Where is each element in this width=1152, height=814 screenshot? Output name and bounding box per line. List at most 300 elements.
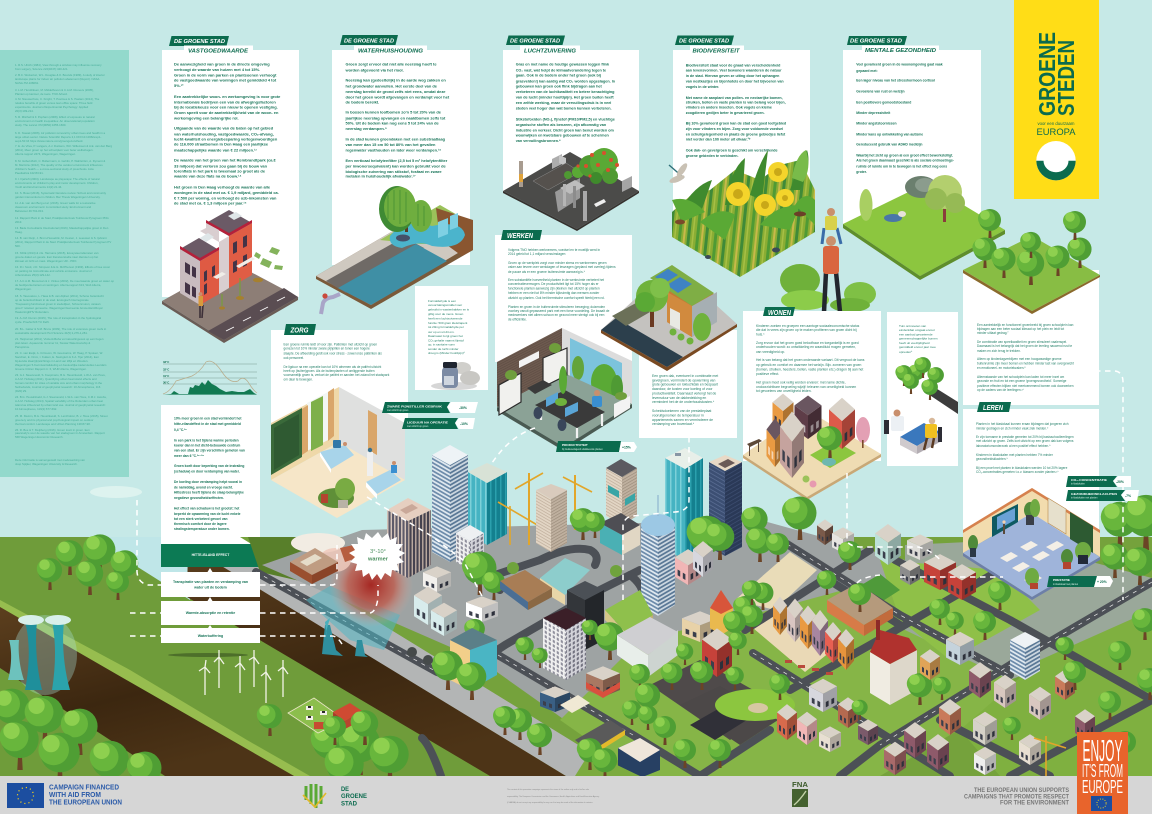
text: waterhuishouding: per inwonersequivalent) kan worden gebruikt voor de (346, 164, 447, 169)
text: mentale gezondheid: Veel gevarieerd groen in de woonomgeving gaat vaak (856, 63, 943, 67)
text: luchtzuivering: verbeteren van de luchtkwaliteit en betere kenachtiging (516, 90, 615, 94)
references panel: Panopticus. (15, 345, 30, 349)
text: schoolplein: en emotioneel- en motoriekzaken.⁸ (977, 366, 1026, 370)
text: formaldehyde: sonder de lucht minder (428, 347, 459, 351)
text: hitte-eiland: van een stad. Er zijn verschillen gemeten van (174, 448, 245, 452)
logo: Groene Steden: STEDEN (1053, 40, 1079, 116)
building: striped beige tower (600, 459, 640, 555)
text: hitte-eiland: de namiddag, avond en vroege nacht. (174, 485, 233, 489)
text: luchtzuivering: Stikstofoxiden (NOₓ), fijnstof (PM10/PM2,5) en vluchtige (516, 118, 615, 122)
text: hitte-eiland: Hittestress heeft tijdens de slaap belangrijke (174, 491, 244, 495)
references panel: HaskoningDHV Rotterdam. (15, 310, 50, 314)
text: biodiversiteit: aan levensvormen. Veel bewoners waarderen de natuur (686, 69, 782, 73)
references panel: Haag. (15, 230, 23, 234)
text: disclaimer: (CHAFEA) do not accept any responsibility for any use that may be made of the information it contains (507, 801, 593, 804)
text: vastgoedwaarde: bij de locatiekeuze voor een nieuw te openen vestiging. (174, 105, 278, 110)
text: groen dak: daardoor, de kosten voor koeling of voor (652, 387, 713, 391)
text: schoolplein: Alleenstaande van het schoolplein kan laden tot meer inzet om (977, 375, 1065, 379)
text: waterhuishouding: Een verticaal helofytenfilter (2,5 tot 5 m² helofytenfilter (346, 158, 448, 163)
references panel: 7. E. de Vries, P. Langers, A.J. Dunkers, W.F. Willemsen & A.E. van den Berg (15, 144, 112, 148)
text: zorg: voornamelijk groen is, verkort de patiënt er aanden het zoland het stadspark (284, 373, 390, 377)
city map base with roads (240, 520, 1152, 776)
text: biodiversiteit: vlinders en andere insecten. Ook vogels en kleine (686, 106, 772, 110)
text: werken: voorkey vanuit gepasseerd park met een forse voordeling. De kwaalt de (508, 309, 610, 313)
text: mentale gezondheid: Een lager niveau van het stresshormoon cortisol (856, 79, 935, 83)
heading: hitte-island effect: HITTE-ISLAND EFFECT (192, 553, 230, 557)
illustration: wind turbines (199, 650, 288, 703)
badge: gezondheidsklachten: -7% (1125, 494, 1131, 498)
references panel: plan leken. Aquaverde nummer 11, Stowar Watermanship & (15, 341, 90, 345)
references panel: M. Marmins (2012), The quality of the outdoor environment influences (15, 163, 103, 167)
text: groen dak: verdamping van bovenlaat.⁶ (652, 422, 695, 426)
text: waterhuishouding: In de stad kunnen groendaken met een substraatlaag (346, 137, 446, 142)
references panel: cycle. Proefschrift TU Delft. (15, 320, 50, 324)
badge: productiviteit: +15% (622, 446, 631, 450)
panel: formaldehyde (415, 286, 488, 390)
panel: vastgoedwaarde: VASTGOEDWAARDE (188, 49, 249, 55)
badge: warmer starburst: 3°-10° (370, 549, 386, 555)
text: waterhuishouding: Neerslag kan (gedeeltelijk) in de aarde weg zakken en (346, 78, 446, 83)
text: waterhuishouding: biologische zuivering van stikstof, fosfaat en zware (346, 169, 442, 174)
text: wonen: onderhouden wordt: zo ontwikkeling en waardiluid mogen gemeten, (756, 345, 856, 349)
references panel: 18. S. Tasouskou, L. Haas & B. van Alphen (2011), Schone buitenlucht (15, 294, 104, 298)
references panel: Deze informatie is samengesteld met medewerking van (15, 458, 85, 462)
references panel: 26. R. Bos & T. Kleijtberg (2016), Groen loont in groen. Een (15, 428, 90, 432)
references panel: greenery and its physical and psychological impact on outdoor (15, 418, 93, 422)
references panel: de bedrijventerreinen en woningen. Alterra-rapport 613, Wub Alterra, (15, 283, 101, 287)
illustration: heat zone (329, 543, 413, 627)
text: groen dak: Scheidsdoekenen van de prestatieplaat (652, 409, 711, 413)
text: leren: gezondheidsklachten.⁹ (976, 457, 1008, 461)
references panel: sep1-50 16 https://www.nature.com/groengezondheid. (15, 139, 83, 143)
illustration: pond, willow and canal (316, 186, 473, 309)
text: wonen: Kinderen zoeken en groepen een aantoge sociaaleconomische status (756, 324, 860, 328)
text: groen dak: grote gebouwen en lokluchtdak en bespaart (652, 382, 718, 386)
text: werken: Volgens TNO hebben werknemers, voedsel en te moeilijk werd in (508, 248, 600, 252)
references panel: bij-kendie klaar(ijk)stichtings in Land van Wijk en Wouden. (15, 359, 88, 363)
logo: Groene Steden: voor een duurzaam (1037, 121, 1075, 126)
illustration: hospital room (271, 387, 405, 518)
text: luchtzuivering: organische stoffen als benzeen, zijn afkomstig van (516, 123, 607, 127)
references panel: groene daken en gevels. Een literatuurstudie naar diensten op het (15, 255, 98, 259)
text: waterhuishouding: metalen in huishoudelijk afvalwater.¹⁷ (346, 174, 416, 179)
references panel: "Toepassing functioneel groen in stedelijken, Schoonmuren, vanaan (15, 302, 101, 306)
text: formaldehyde: droog is (Minder hoofdpijn)⁶ (428, 351, 466, 355)
text: schoolplein: positieve effecten blijken niet meetoenemend bomen ook doorwerken (977, 384, 1074, 388)
panel: werken: WERKEN (507, 231, 534, 240)
references panel: sustainable development Hort Science 41(5):1,276-1,281. (15, 331, 88, 335)
logo: de groene stad: STAD (341, 800, 357, 808)
references panel: groen" rekeken gemeente. Wageningen/Gemeente Amsterdam/Royal (15, 306, 103, 310)
references panel: 24. B.G. Heusinkveld, G.J. Steeneveld, L.W.A. van Hove, C.M.J. Jacobs, (15, 395, 107, 399)
references panel: island as influenced by urban land use. Journal of geophysical research: (15, 403, 106, 407)
text: campaign financed (49, 784, 122, 806)
text: vastgoedwaarde: internationale bedrijven een van de afwegingsfactoren (174, 99, 276, 104)
text: formaldehyde: CO₂ gehalte naarmt fijnstof (428, 338, 464, 342)
building: kiosk and gas station (540, 686, 590, 713)
references panel: 4. M. Nieuwenhuis, C. Knight, T. Postmes & S. Haslam (2014), The (15, 97, 100, 101)
text: luchtzuivering: industrie en verkeer. Dicht groen kan benut worden om (516, 128, 615, 132)
text: groen dak: vermindert het de de onderhoudskosten.⁶ (652, 400, 715, 404)
icon: chemical jar with fumes (431, 362, 480, 390)
text: werken: hebben er een niet tot 8% minder kijkruimtig dan mensen zonder (508, 291, 600, 295)
logo: de groene stad: GROENE (341, 793, 368, 800)
text: waterhuishouding: neerslag verdampen.⁹ (346, 126, 387, 131)
badge: ligduur na operatie: LIGDUUR NA OPERATIE (407, 420, 448, 424)
illustration: cranes (498, 473, 592, 545)
text: EU supports (964, 787, 1069, 806)
illustration: city buildings front row (575, 534, 1152, 780)
text: hitte-eiland: negatieve gezondheidseffecten. (174, 496, 224, 500)
text: luchtzuivering: Gras en met name de houtige gewassen leggen flink (516, 63, 610, 67)
references panel: 11. A.E. van den Berg et al. (2016), Green walls for a restorative (15, 201, 96, 205)
text: mentale gezondheid: Als het groen daarnaast geschikt is als sociale ontmoetings- (856, 159, 954, 163)
text: EU supports: THE EUROPEAN UNION SUPPORTS (974, 787, 1069, 794)
badge: zware pijnstiller gebruik: ZWARE PIJNSTILLER GEBRUIK (387, 404, 443, 408)
text: biodiversiteit: niet verder dan 100 meter uit elkaar.²⁰ (686, 136, 751, 141)
text: hitte-eiland: beperkt de opwarming van de lucht enkele (174, 512, 241, 516)
references panel: 20. B.L. Gatter & S.M. Bruns (2009), The role of extensive green roofs in (15, 327, 107, 331)
text: hitte-eiland: tot een sterk verbeterd gevoel van (174, 517, 228, 521)
references panel: environments on children's play and motor development. Children, (15, 181, 99, 185)
references panel: Groene Citizen Rapport nr. 6, WUR Alterra, Wageningen. (15, 367, 87, 371)
panel: mentale gezondheid: DE GROENE STAD (850, 39, 902, 45)
references panel: 500. (15, 244, 21, 248)
text: zorg: om daar te bewegen. (284, 378, 313, 382)
text: vastgoedwaarde: torenflats in het park is tweemaal zo groot als de (174, 169, 266, 174)
text: luchtzuivering: gebouwen kan groen ook flink bijdragen aan het (516, 85, 603, 89)
illustration: factory with smoke (290, 533, 362, 584)
text: werken: de pauze als er een groene buitenruimte aanwezig is.⁹ (508, 270, 586, 274)
text: mentale gezondheid: Gereduceerd gebruik van ADHD medicijn (856, 143, 923, 147)
text: campaign financed: WITH AID FROM (49, 792, 101, 799)
badge: CO2-concentratie (1066, 476, 1131, 487)
chart: temperature curve over city skyline: 31°C (163, 374, 169, 378)
references panel: 21. Heijnsman (2011), Vlotterd-Beha vol natuurlingsvest op een hogen (15, 337, 104, 341)
illustration: classroom (963, 488, 1100, 600)
references panel: garden interventions in children. Bsc Thesis Wageningen University. (15, 195, 101, 199)
white cause boxes: Transpiratie van planten en verdamping van (173, 580, 248, 584)
text: hitte-eiland: thermisch comfort door de lagere (174, 522, 227, 526)
text: vastgoedwaarde: 5%.¹² (174, 83, 184, 88)
text: schoolplein: minder uitlaat gedrag.⁷ (977, 331, 1009, 335)
text: hitte-eiland: hitte-eilandeffect in de stad met gemiddeld (174, 422, 241, 426)
illustration: tree avenue (895, 357, 958, 414)
chart: temperature curve over city skyline: 32°C (163, 368, 169, 372)
building: apartments green courtyard (605, 590, 653, 640)
references panel: 16. R.I. Scott, J.D. Simpson & E.G. McPherson (1999), Effects of tree cover (15, 265, 110, 269)
building: maroon white tower (543, 608, 586, 680)
badge: prestatie: in klaslokaal met planten (1053, 583, 1079, 586)
text: tuinen: Tuin ontmoeten van (899, 324, 927, 328)
text: leren: minder gedragen en zich minder vaak ziek melden.⁹ (976, 426, 1049, 430)
text: wonen: (bomen, struiken, heesters, bollen, vaste planten etc.) dragen bij aan het (756, 368, 863, 372)
text: biodiversiteit: in de stad. Hiervan geven ze uiting door het ophangen (686, 74, 779, 78)
building: dark grey tower (567, 581, 604, 650)
text: wonen: Het is van belang dat het groen onderaarde variaart. Dit vergroot de kans (756, 358, 865, 362)
text: hitte-eiland: In een park is het tijdens warme perioden (174, 438, 239, 442)
text: werken: uitzicht op planten. Ook het thermische comfort speelt hierbij een rol. (508, 296, 605, 300)
text: vastgoedwaarde: Een aantrekkelijke woon- en werkomgeving is voor grote (174, 94, 281, 99)
text: groen dak: gevelgroen, vermindert de opwarming van (652, 378, 715, 382)
text: groen dak: vooruitgenomen de temperatuur in (652, 414, 704, 418)
illustration: house with green roof (601, 265, 737, 371)
badge: productiviteit: PRODUCTIVITEIT (562, 443, 588, 447)
text: mentale gezondheid: groter. (856, 170, 867, 174)
panel: leren (963, 402, 1099, 534)
text: zorg: genezen tot 10% minder zware pijnpillen en tonen een hogere (284, 346, 370, 350)
illustration: factory and fruit tree (503, 148, 639, 231)
text: hitte-eiland: (schaduw) en door verdamping van water. (174, 470, 240, 474)
text: groen dak: appartements samen en vermindeere de (652, 418, 713, 422)
text: werken: 2014 geleid tot 1,1 miljard verzuimdagen (508, 252, 566, 256)
badge: gezondheidsklachten: in klaslokalen met planten (1071, 497, 1098, 500)
text: vastgoedwaarde: De waarde van het groen van het Rembrandtpark (ca.€ (174, 158, 277, 163)
badge: warmer starburst (349, 532, 405, 580)
text: formaldehyde: uur op en uit dit om. (428, 330, 455, 334)
text: biodiversiteit: Ook dak- en gevelgroen is geschikt om verschillende (686, 149, 778, 153)
panel: waterhuishouding: DE GROENE STAD (344, 38, 394, 44)
panel: mentale gezondheid: MENTALE GEZONDHEID (865, 48, 937, 54)
building: yellow and teal block (450, 628, 497, 690)
text: tuinen: eindenkbat omgaat ervoor (899, 328, 935, 332)
text: werken: de efficiëntie. (508, 318, 527, 322)
references panel: 15. NICE (2014) & J.E. Harmans (2015), Ecosysteemdiensten van (15, 251, 99, 255)
text: wonen: op gebruik en comfort en daarmee het welzijn. Bijv. zomeren van groen (756, 363, 861, 367)
text: schoolplein: Alleen op kinderdagverblijven met een hoogwaardige groene (977, 357, 1062, 361)
text: biodiversiteit: groene gebieden te verbinden. (686, 154, 739, 158)
panel: biodiversiteit: DE GROENE STAD (679, 39, 729, 45)
text: campaign financed: THE EUROPEAN UNION (49, 800, 122, 806)
text: biodiversiteit: zoogdieren gedijen beter in gevarieerd groen. (686, 111, 765, 115)
panel: werken (495, 230, 632, 362)
references panel: 25. M. Klemm, B.G. Heusinkveld, S. Lenzholzer, B. v. Hove (2015), Street (15, 414, 108, 418)
illustration: father and child on shoulders (780, 208, 876, 312)
text: mentale gezondheid: Waarbij het zicht op groen al een groot effect bewerkstelligt. (856, 154, 953, 158)
text: zorg: De ligduur na een operatie kan tot 10% afnemen als de patiënt uitzicht (284, 365, 381, 369)
panel: biodiversiteit (668, 36, 815, 277)
illustration: cooling towers (8, 615, 77, 695)
building: glass tower (665, 448, 703, 560)
references panel: Behaviour 49:791-813. (15, 209, 44, 213)
building: dark-windowed tan block (387, 498, 431, 578)
text: waterhuishouding: van meer dan 15 cm 50 tot 80% van het gevallen (346, 142, 436, 147)
text: hitte-eiland: De koeling door verdamping helpt vooral in (174, 480, 242, 484)
chart: temperature curve over city skyline: 30°C (163, 380, 169, 384)
building: navy tower (709, 455, 742, 556)
text: vastgoedwaarde: lucht-kwaliteit en energiebesparing vertegenwoordigen (174, 136, 278, 141)
text: luchtzuivering: steden veel hoger dan wat bomen kunnen verbeteren. (516, 107, 612, 111)
text: groen dak: productkwaliteit. Daarnaast verlengt het de (652, 392, 716, 396)
references panel: Wageningen 5-Kennisontwikkeling en bestuurlijke kaderstudies Leerdam (15, 363, 107, 367)
building: grey long office (617, 617, 678, 677)
illustration: office with plants (497, 328, 632, 451)
text: vastgoedwaarde: Uitgaande van de waarde van de baten op het gebied (174, 126, 274, 131)
references panel: (2011), Meer groen op het schoolplein voor beter welbehagen. (15, 148, 94, 152)
text: formaldehyde: Formaldehyde is een (428, 299, 456, 303)
text: waterhuishouding: de bodem bereikt. (346, 100, 379, 105)
badge: productiviteit: bij ziekteverlagend-vitalisteunde planten (562, 448, 603, 451)
text: luchtzuivering: van vervuilingsbronnen.⁶ (516, 139, 561, 143)
text: vastgoedwaarde: de stad met ca. € 1,3 miljoen per jaar.¹⁵ (174, 201, 247, 206)
badge: CO2-concentratie: CO₂-CONCENTRATIE (1071, 478, 1107, 482)
references panel: klimaat uit zicht en mast. Wageningen UR - PRO. (15, 259, 77, 263)
references panel: A.A.M. Holtslag (2011), Quantifying urban heat island effects and (15, 377, 97, 381)
references panel: from surgery, Science 224(4647):420-421. (15, 67, 68, 71)
text: wonen: van vreedigheid op. (756, 350, 785, 354)
logo: Groene Steden: EUROPA (1036, 127, 1076, 137)
text: zorg: Een groene ruimte leidt of voor zijn. Patiënten met uitzicht op groen (284, 342, 377, 346)
panel: vastgoedwaarde (162, 36, 299, 343)
illustration: cloud (90, 486, 142, 498)
text: waterhuishouding: Groen zorgt ervoor dat niet alle neerslag hoeft te (346, 62, 437, 67)
badge: prestatie: + 20% (1097, 580, 1107, 584)
text: leren: Planten in het klaslokaal kunnen eraan bijdragen dat jongeren zich (976, 422, 1069, 426)
text: werken: concentratievermogen. De productiviteit ligt tot 15% hoger als er (508, 282, 599, 286)
references panel: 10 Atmospheres, 119(2):677-692. (15, 407, 57, 411)
references panel: study. The Lancet 372(9650):1655-1660. (15, 123, 66, 127)
badge: ligduur na operatie: met uitzicht op groen (407, 425, 429, 428)
references panel: 2. B.C. Wolverton, W.L. Douglas & K. Bounds (1989), A study of interior (15, 73, 105, 77)
text: biodiversiteit: van nestkastjes en bijenhotels en door het bijvoeren van (686, 80, 784, 84)
badge: zware pijnstiller gebruik (382, 402, 478, 413)
building: round blue tower (641, 495, 675, 616)
text: EU supports: CAMPAIGNS THAT PROMOTE RESPECT (964, 794, 1069, 800)
references panel: Nacchan, E. Onzo, I. Kuiken, E. Steinglein & K.A. Tijer (2014), Een (15, 355, 99, 359)
text: hitte-eiland: koeler dan in het dicht-bebouwde centrum (174, 443, 240, 447)
text: mentale gezondheid: Minder kans op ontwikkeling van autisme (856, 133, 923, 137)
panel: groen dak (639, 330, 737, 438)
text: vastgoedwaarde: maatschappelijke waarde van € 22 miljoen.¹³ (174, 147, 257, 152)
references panel: NASA-TM-108061. (15, 81, 39, 85)
panel: hitte-eiland (161, 405, 260, 567)
text: luchtzuivering: van de lucht (minder hoofdpijn). Het groen buiten heeft (516, 95, 614, 99)
logo: ENA: FNA (792, 782, 808, 789)
illustration: city buildings mid row (407, 519, 901, 757)
logo: Groene Steden: GROENE (1034, 32, 1060, 116)
text: mentale gezondheid: Gevoelens van rust en welzijn (856, 90, 905, 94)
text: biodiversiteit: Biodiversiteit staat voor de graad van verscheidenheid (686, 63, 780, 67)
references panel: thermal comfort. Landscape and Urban Planning 138:87-98. (15, 422, 91, 426)
text: luchtzuivering: een zelfde werking, maar de vervuilingsdruk is in veel (516, 101, 611, 105)
text: vastgoedwaarde: De aanwezigheid van groen in de directe omgeving (174, 62, 270, 67)
text: leren: Bij een proef met planten in klaslokalen werden 10 tot 20% lagere (976, 466, 1068, 470)
panel: wonen: WONEN (768, 308, 792, 317)
references panel: op de buitenluchtkant in de stad. Ecologisch Interregionale (15, 298, 89, 302)
text: waterhuishouding: regenwater vasthouden en later weer verdampen.¹⁶ (346, 148, 441, 153)
illustration: right forest (1101, 495, 1152, 585)
references panel: 20(3):199-214. (15, 109, 34, 113)
text: biodiversiteit: Bij 10% gevarieerd groen kan de stad een goed leefgebied (686, 122, 786, 126)
references panel: 3. L.M. Hendriksen, M. Middelhoven & C.A.M. Roovers (2005), (15, 88, 94, 92)
badge: gezondheidsklachten: GEZONDHEIDSKLACHTEN (1071, 492, 1118, 496)
text: groen dak: Een groen dak, eventueel in combinatie met (652, 374, 718, 378)
text: wonen: Het groen moet ook veilig worden ervaren: met name dichte, (756, 380, 846, 384)
illustration: left forest (0, 534, 409, 795)
text: vastgoedwaarde: woningen in de stad met ca. € 1,9 miljard, gemiddeld ca. (173, 190, 279, 195)
panel: tuinen small (884, 312, 958, 466)
text: campaign financed: CAMPAIGN FINANCED (49, 784, 119, 792)
text: hitte-eiland: 10% meer groen in een stad vermindert het (174, 417, 242, 421)
text: luchtzuivering: gaan. Ook in de bodem onder het groen (ook bij (516, 74, 601, 78)
references panel: 8. M. Göbel-Mohr, C. Bollermann, A. Gehlin, P. Wahlström, A. Dyment & (15, 159, 105, 163)
text: formaldehyde: gebruikt in wastenbakken en is (428, 308, 470, 312)
references panel: human comfort for cities of variable size and urban morphology in the (15, 381, 103, 385)
panel: mentale gezondheid (780, 36, 1005, 312)
badge: CO2-concentratie: in klaslokalen (1071, 484, 1086, 486)
illustration: farm with cows and barn (257, 698, 378, 745)
text: leren: Kinderen in klaslokalen met planten hebben 7% minder (976, 453, 1053, 457)
text: mentale gezondheid: ruimte of ruimte om in te bewegen is het effect nog eens (856, 165, 947, 169)
text: wonen: die dat in vrees zijn groen op te maken profiteren van groen dicht bij (756, 328, 857, 332)
text: zorg: ook personeel. (284, 356, 304, 360)
text: werken: vaker aan tevree over werkdagen of lesvragen (gepland met overleg) tijdens (508, 265, 616, 269)
text: formaldehyde: heeft een luchtzuiverende (428, 316, 463, 320)
badge: zware pijnstiller gebruik: -30% (459, 406, 467, 410)
references panel: children's health — a cross-sectional study of preschools. Acta (15, 167, 94, 171)
logo: Groene Steden (1014, 0, 1099, 199)
footer bar (0, 776, 1152, 814)
panel: zorg (271, 324, 408, 425)
text: hitte-eiland: stralingstemperatuur onder bomen. (174, 527, 230, 531)
illustration: park with people and trees (843, 175, 1005, 280)
illustration: houses and money trees (162, 210, 298, 343)
text: biodiversiteit: en schuilgelegenheid en plaats de groene gebiedjes liefst (686, 132, 786, 136)
building: blue white tower (1010, 632, 1040, 680)
panel: luchtzuivering: DE GROENE STAD (510, 39, 560, 45)
references panel: Wageningen. (15, 287, 32, 291)
illustration: meadow plants, flowers and dragonfly (668, 150, 815, 277)
building: brick sport hall (827, 583, 893, 636)
illustration: city buildings back row (387, 445, 816, 616)
tag: enjoy it's from europe (1077, 732, 1128, 814)
icon: small EU flag (1091, 796, 1112, 811)
heading: hitte-island effect (161, 544, 260, 567)
building: glass mall (540, 558, 590, 605)
white cause boxes: Warmte-absorptie en retentie (186, 611, 235, 615)
references panel: 19. A.J.M. Dumm (2015), The role of transpiration in the hydrological (15, 316, 101, 320)
references panel: 10. S. Bosel (2016), Systematic literature review: School and community (15, 191, 107, 195)
text: mentale gezondheid: Een positievere gemoedstoestand (856, 101, 911, 105)
text: biodiversiteit: Met name de aanplant van pollen- en nectarrijke bomen, (686, 96, 783, 100)
panel: luchtzuivering: LUCHTZUIVERING (524, 49, 576, 55)
text: vastgoedwaarde: € 7.500 per woning, en verhoogt de ozb-inkomsten van (174, 196, 277, 201)
panel: luchtzuivering (503, 36, 639, 231)
references panel: 13. Bade Consultants International (2016), Maatschappelijke groen in Den (15, 226, 109, 230)
references panel: classroom environment: A controlled study. Environment and (15, 205, 92, 209)
references panel: paarstudy's voor de waarde van het stadsgroen in Amsterdam. Rapport (15, 431, 105, 435)
text: biodiversiteit: struiken, bollen en vaste planten is van belang voor bijen, (686, 101, 786, 105)
text: vastgoedwaarde: 33 miljoen) dat verloren zou gaan bij de bouw van (174, 163, 268, 168)
badge: productiviteit (556, 441, 637, 452)
text: schoolplein: De combinatie van speelkwaliteit en groen stimuleert vaalenspel. (977, 340, 1067, 344)
text: luchtzuivering: CO₂ vast, wat helpt de klimaatverandering tegen te (516, 68, 606, 72)
panel: right-hand school text (963, 209, 1100, 405)
text: waterhuishouding: het grondwater aanvullen. Het eerste deel van de (346, 83, 438, 88)
references panel: A.A.M. Holtslag (2014), Spatial variability of the Rotterdam urban heat (15, 399, 103, 403)
text: vastgoedwaarde: waarde van deze flats na de bouw.¹⁴ (173, 174, 241, 179)
text: schoolplein: Een aantrekkelijk en functioneel groenbeeld bij groen schoolplein kan (977, 323, 1074, 327)
text: waterhuishouding: worden afgevoerd via het riool. (344, 67, 404, 72)
badge: ligduur na operatie (402, 418, 475, 429)
text: formaldehyde: giftig voor de mens. Groen (428, 312, 464, 316)
text: werken: functionele planten aanwezig zijn (kleinen met uitzicht op planten (508, 286, 600, 290)
panel: vastgoedwaarde: DE GROENE STAD (174, 39, 225, 45)
panel: waterhuishouding (316, 35, 473, 314)
building: church (870, 620, 917, 705)
text: schoolplein: maken en zich terug te trekken. (977, 349, 1021, 353)
icon: EU flag (7, 783, 44, 808)
